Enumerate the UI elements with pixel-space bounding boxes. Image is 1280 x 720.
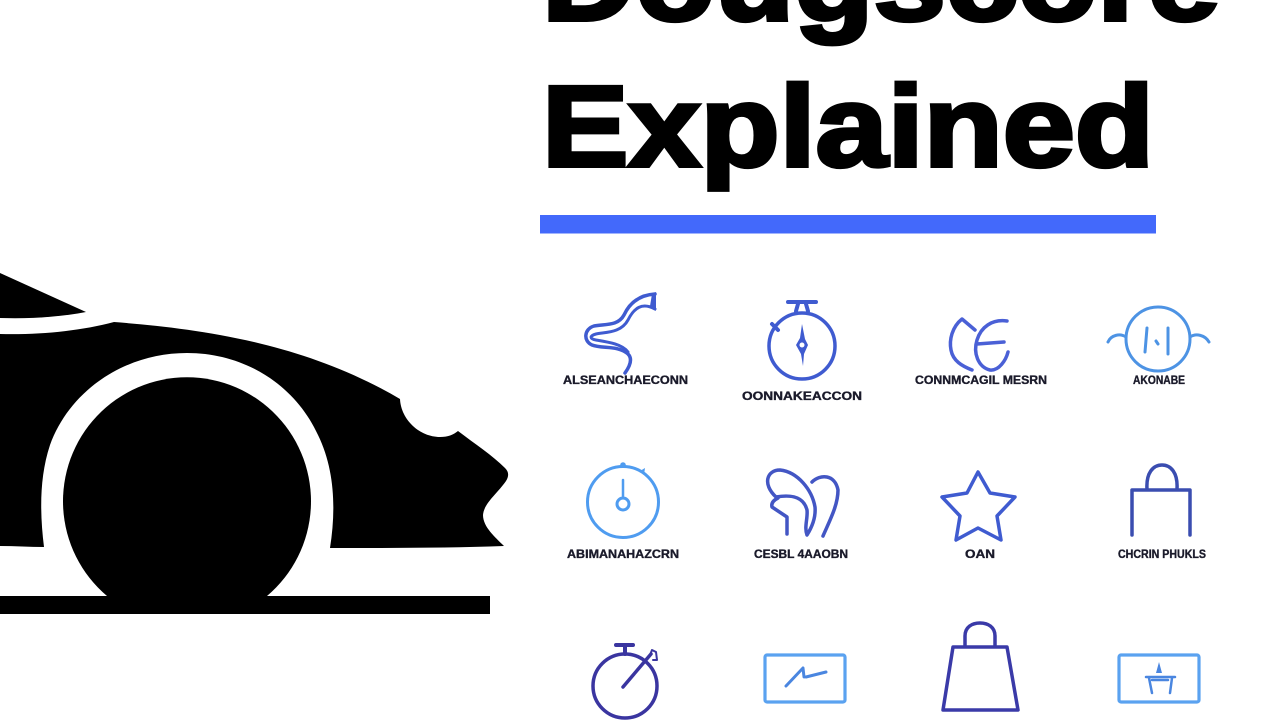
item: star icon: OAN (965, 549, 995, 561)
front wheel (63, 377, 311, 596)
item: stopwatch compass icon (742, 302, 862, 403)
item: snake curve icon (563, 292, 688, 387)
item: open bag icon (1118, 465, 1206, 561)
item: light blue stopwatch icon: ABIMANAHAZCRN (567, 549, 679, 561)
item: framed chart icon (765, 655, 845, 702)
title line two: Explained (542, 63, 1154, 191)
item: star icon (942, 472, 1015, 561)
icon grid (563, 292, 1209, 718)
title (542, 0, 1220, 191)
item: looped tube icon: CESBL 4AAOBN (754, 549, 848, 561)
item: round gauge with side arcs icon (1108, 307, 1209, 387)
road line (0, 596, 490, 614)
item: light blue stopwatch icon (567, 462, 679, 561)
item: looped tube icon (754, 470, 848, 561)
item: snake curve icon: ALSEANCHAECONN (563, 375, 688, 387)
car silhouette illustration (0, 273, 508, 614)
item: CE letter curves icon: CONNMCAGIL MESRN (915, 375, 1047, 387)
item: shopping bag icon (943, 623, 1018, 710)
item: stopwatch compass icon: OONNAKEACCON (742, 391, 862, 403)
car windshield piece (0, 273, 86, 318)
item: round gauge with side arcs icon: AKONABE (1133, 375, 1185, 387)
item: framed candle icon (1119, 655, 1199, 702)
item: dark stopwatch icon (593, 645, 657, 718)
item: CE letter curves icon (915, 319, 1047, 387)
item: open bag icon: CHCRIN PHUKLS (1118, 549, 1206, 561)
car body with wheel arch (0, 322, 508, 548)
blue title underline (540, 215, 1156, 234)
